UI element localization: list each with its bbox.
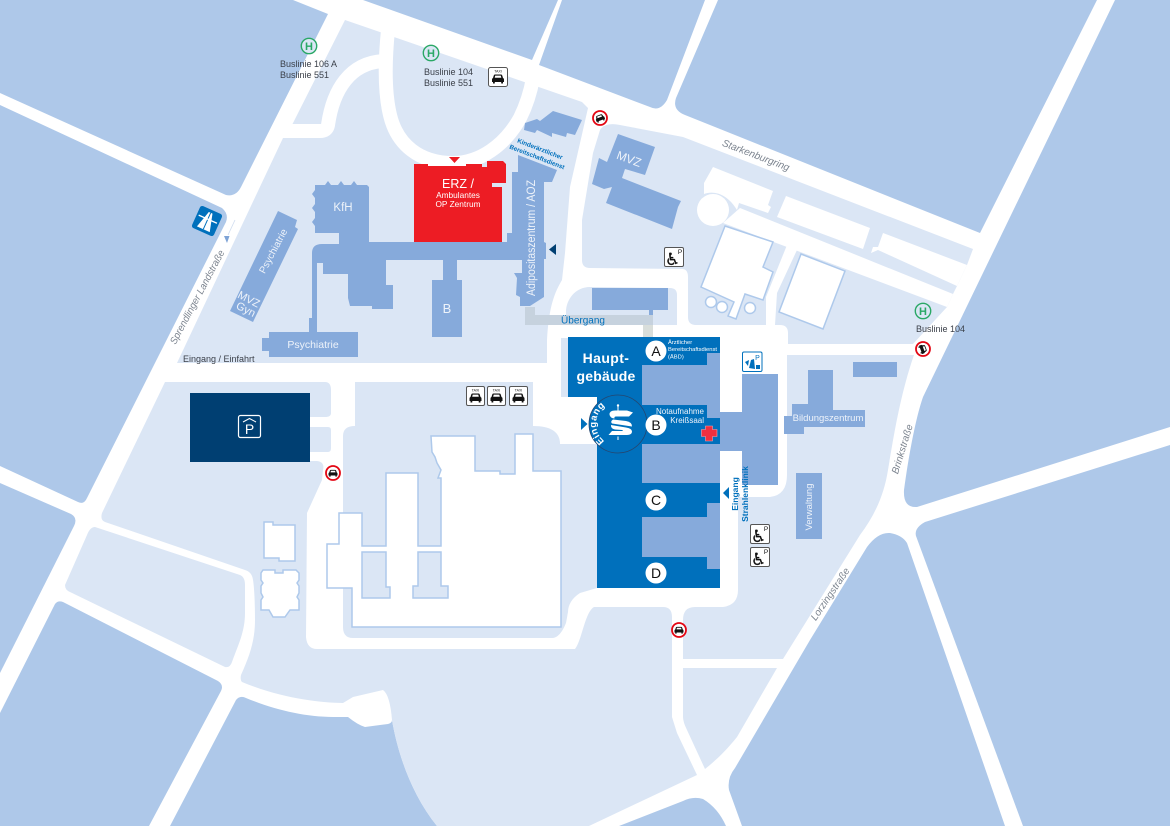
label: Uebergang: Übergang <box>561 314 605 326</box>
bus stop: 104 / 551: H <box>427 48 435 60</box>
courtyards <box>362 552 448 598</box>
icons: taxi rank: TAXI <box>515 388 522 392</box>
building labels: Ambulantes <box>436 190 480 200</box>
outlined buildings: east <box>701 226 845 329</box>
internal roads <box>280 30 533 163</box>
street names: Lorzingstraße <box>809 566 853 623</box>
icon: ambulance parking <box>742 352 762 372</box>
marker B <box>646 414 666 436</box>
icons: taxi rank <box>466 386 528 406</box>
sign: no entry west <box>326 466 340 480</box>
label: Hauptgebaeude <box>577 350 635 384</box>
street names: Starkenburgring <box>720 138 791 174</box>
marker A: A <box>651 343 661 359</box>
marker B: B <box>651 417 661 433</box>
icon: ambulance parking: P <box>755 355 760 362</box>
label: Aerztlicher Bereitschaftsdienst: Ärztlicher <box>668 339 692 346</box>
street names: Brinkstraße <box>890 423 916 475</box>
bus stop: 106 A / 551: Buslinie 106 A <box>280 59 337 69</box>
icon: taxi at bus stop: TAXI <box>494 70 502 74</box>
bus stop: 104 / 551 <box>423 45 473 88</box>
campus grounds <box>65 20 973 826</box>
arrow: Strahlenklinik entrance <box>723 487 729 499</box>
label: Aerztlicher Bereitschaftsdienst <box>668 339 717 360</box>
main building wings <box>642 353 778 569</box>
label: Hauptgebaeude: gebäude <box>577 368 635 384</box>
icon: red cross <box>702 426 717 441</box>
building labels: Bildungszentrum <box>793 413 863 424</box>
outlined buildings: south-west <box>261 522 299 617</box>
bus stop: 104 / 551: Buslinie 551 <box>424 78 473 88</box>
building labels: Gyn <box>234 300 257 320</box>
label: Notaufnahme Kreisssaal <box>656 407 705 425</box>
building labels <box>234 148 863 531</box>
outlined building: main clinic wing <box>327 434 561 627</box>
main building: Hauptgebaeude <box>568 337 720 588</box>
icon: accessible parking east 2: ♿ <box>751 550 766 570</box>
parking garage <box>190 393 310 462</box>
label: Eingang Strahlenklinik: Strahlenklinik <box>740 466 750 522</box>
label: Notaufnahme Kreisssaal: Notaufnahme <box>656 407 705 416</box>
building labels: KfH <box>333 202 353 214</box>
bus stop: 104 east <box>915 303 965 334</box>
label: Eingang / Einfahrt: Eingang / Einfahrt <box>183 354 255 364</box>
building labels: MVZ <box>235 289 262 311</box>
sign: no entry east <box>916 342 930 356</box>
building: small east block <box>853 362 897 377</box>
marker D <box>646 562 666 584</box>
building labels: Adipositaszentrum / AOZ <box>526 180 538 296</box>
marker: ERZ entrance <box>449 157 460 163</box>
passage <box>525 307 653 337</box>
street names: Sprendlinger Landstraße <box>168 248 228 346</box>
label: Eingang Strahlenklinik <box>730 466 750 522</box>
parking garage: P <box>245 421 254 437</box>
bus stop: 104 east: Buslinie 104 <box>916 324 965 334</box>
marker C: C <box>651 492 661 508</box>
arrow: main entrance <box>581 418 588 430</box>
marker C <box>646 490 666 510</box>
building: diagonal Psychiatrie / MVZ Gyn <box>230 211 298 322</box>
bus stop: 104 east: H <box>919 306 927 318</box>
building: Bildungszentrum <box>784 370 865 434</box>
label: Aerztlicher Bereitschaftsdienst: Bereitschaftsdienst <box>668 347 717 353</box>
bus stop: 106 A / 551: H <box>305 41 313 53</box>
icon: motorway <box>191 205 223 237</box>
label: Kinderaerztlicher Bereitschaftsdienst: Kinderärztlicher <box>516 138 564 162</box>
marker A <box>646 340 666 362</box>
icon: accessible parking east 1: P <box>764 526 768 533</box>
building labels: ERZ / <box>442 177 474 191</box>
label: Hauptgebaeude: Haupt- <box>583 350 629 366</box>
arrow: Adipositaszentrum entrance <box>549 244 556 255</box>
bus stop: 106 A / 551 <box>280 38 337 80</box>
sign: no entry north <box>593 111 607 125</box>
label: Notaufnahme Kreisssaal: Kreißsaal <box>670 416 704 425</box>
icons: taxi rank: TAXI <box>472 388 479 392</box>
bus stop: 104 / 551: Buslinie 104 <box>424 67 473 77</box>
icons: taxi rank: TAXI <box>493 388 500 392</box>
building: Kinderaerztlicher Bereitschaftsdienst <box>524 111 582 137</box>
street names <box>168 138 916 623</box>
arrow: Sprendlinger Landstrasse <box>224 220 235 243</box>
building: low Psychiatrie <box>262 318 358 357</box>
icon: accessible parking east 2: P <box>764 549 768 556</box>
building: Verwaltung <box>796 473 822 539</box>
building labels: OP Zentrum <box>435 199 481 209</box>
service road and parking lots <box>697 167 967 325</box>
building: ERZ <box>414 161 506 242</box>
marker D: D <box>651 565 661 581</box>
building: MVZ <box>592 134 681 229</box>
sign: no entry south <box>672 623 686 637</box>
main entrance emblem <box>588 394 647 454</box>
icon: accessible parking north: ♿ <box>665 250 680 270</box>
icon: accessible parking east 1: ♿ <box>751 527 766 547</box>
building labels: Psychiatrie <box>258 227 290 276</box>
building labels: B <box>443 301 451 316</box>
main entrance emblem: Eingang <box>590 402 605 446</box>
label: Kinderaerztlicher Bereitschaftsdienst: Bereitschaftsdienst <box>508 144 566 172</box>
building: KfH complex with corridors <box>312 155 557 337</box>
building labels: Verwaltung <box>804 483 815 531</box>
building: passage block <box>592 288 668 315</box>
label: Eingang Strahlenklinik: Eingang <box>730 477 740 511</box>
icon: taxi at bus stop <box>488 68 508 86</box>
building labels: MVZ <box>615 148 643 170</box>
building labels: Psychiatrie <box>287 339 339 351</box>
label: Aerztlicher Bereitschaftsdienst: (ÄBD) <box>668 354 684 360</box>
bus stop: 106 A / 551: Buslinie 551 <box>280 70 329 80</box>
icon: accessible parking north: P <box>678 249 682 256</box>
